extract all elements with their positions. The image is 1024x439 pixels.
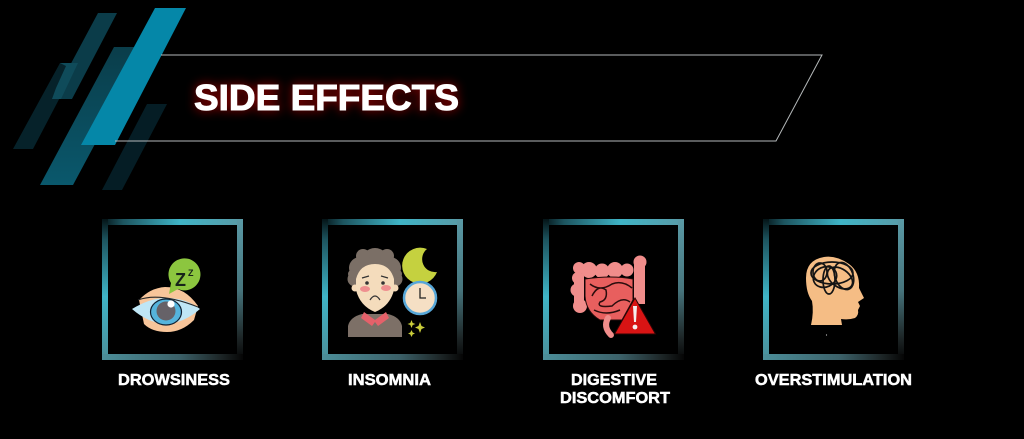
panel: insomnia — [322, 219, 463, 389]
label: digestive discomfort — [560, 372, 671, 407]
icon: intestines with warning — [570, 256, 656, 335]
frame: insomnia — [322, 219, 463, 360]
label: insomnia: INSOMNIA — [348, 372, 431, 389]
panel: drowsiness — [102, 219, 243, 389]
frame: digestive discomfort — [543, 219, 684, 360]
icon: tired person with moon and clock — [348, 248, 437, 337]
label: digestive discomfort: DIGESTIVE — [571, 372, 657, 389]
panel: digestive discomfort — [543, 219, 684, 407]
icon: head with tangled thoughts — [806, 257, 864, 336]
icon: drowsy eye — [132, 258, 200, 332]
label: digestive discomfort: DISCOMFORT — [560, 390, 671, 407]
title banner outline — [115, 55, 822, 141]
title: SIDE EFFECTS — [194, 77, 459, 118]
frame: overstimulation — [763, 219, 904, 360]
title: SIDE EFFECTS — [194, 77, 459, 118]
label: drowsiness: DROWSINESS — [118, 372, 230, 389]
frame: drowsiness — [102, 219, 243, 360]
icon: drowsy eye: Z — [188, 268, 194, 278]
decorative slanted bars — [13, 8, 186, 190]
label: overstimulation: OVERSTIMULATION — [755, 372, 912, 389]
panel: overstimulation — [755, 219, 912, 389]
icon: drowsy eye: Z — [175, 270, 186, 290]
